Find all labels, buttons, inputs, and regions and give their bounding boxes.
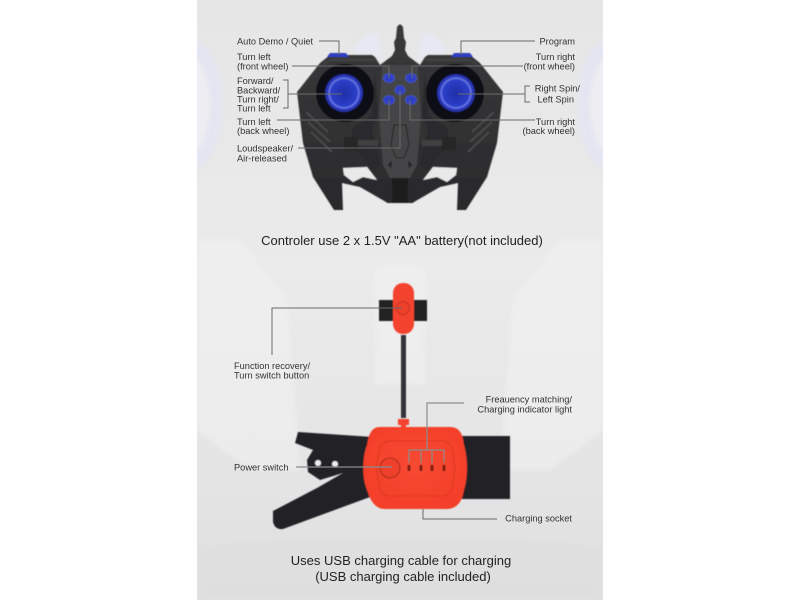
labels: watch remote: Turn switch button (234, 370, 309, 380)
labels: watch remote: Charging socket (505, 514, 572, 524)
heading: battery note: Controler use 2 x 1.5V "AA" battery(not included) (261, 233, 543, 248)
labels: controller left: Turn left (237, 52, 271, 62)
callout lines: watch remote (272, 308, 497, 519)
labels: controller left: Air-released (237, 154, 287, 164)
labels: controller left: Turn right/ (237, 94, 279, 104)
controller (297, 24, 503, 210)
icon: pill button (396, 302, 410, 314)
labels: controller left: Auto Demo / Quiet (237, 36, 314, 46)
icon: right joystick (426, 64, 484, 122)
icon: small strap (379, 300, 427, 321)
icon: window holes (343, 167, 457, 182)
labels: controller right (523, 36, 580, 136)
labels: controller left (237, 36, 314, 164)
labels: controller right: Turn right (536, 117, 575, 127)
icon: top buttons (327, 53, 473, 57)
icon: small blue buttons (384, 74, 416, 104)
icon: cable (401, 335, 406, 418)
labels: controller left: (back wheel) (237, 126, 289, 136)
labels: controller right: Turn right (536, 52, 575, 62)
icon: power button (380, 458, 400, 478)
labels: watch remote: Function recovery/ (234, 361, 311, 371)
icon: inner outline (376, 441, 455, 496)
icon: controller body (297, 24, 503, 210)
labels: controller right: Program (540, 36, 575, 46)
icon: red body (363, 427, 467, 509)
icon: indicator lights (408, 465, 446, 471)
icon: left strap (273, 432, 385, 529)
background panel (197, 0, 603, 600)
icon: connector (398, 419, 409, 428)
icon: centre panel (306, 60, 494, 203)
callout lines: controller (277, 41, 535, 148)
labels: watch remote: Freauency matching/ (486, 394, 572, 404)
caption: USB charging: Uses USB charging cable for charging (291, 553, 511, 568)
watch remote (273, 283, 510, 529)
icon: left joystick (316, 64, 374, 122)
labels: watch remote: Power switch (234, 462, 288, 472)
labels: controller left: (front wheel) (237, 62, 288, 72)
labels: watch remote (234, 361, 572, 524)
labels: controller right: Left Spin (537, 94, 574, 104)
icon: right strap (450, 436, 510, 499)
icon: red pill (393, 283, 414, 334)
labels: controller left: Turn left (237, 104, 271, 114)
labels: watch remote: Charging indicator light (477, 404, 572, 414)
labels: controller left: Backward/ (237, 86, 281, 96)
labels: controller right: (front wheel) (524, 62, 575, 72)
labels: controller left: Turn left (237, 117, 271, 127)
caption: USB charging: (USB charging cable included) (315, 569, 491, 584)
labels: controller left: Loudspeaker/ (237, 144, 293, 154)
labels: controller left: Forward/ (237, 76, 274, 86)
caption: USB charging (291, 553, 511, 584)
labels: controller right: (back wheel) (523, 126, 575, 136)
labels: controller right: Right Spin/ (535, 84, 580, 94)
icon: strap holes (315, 460, 338, 467)
